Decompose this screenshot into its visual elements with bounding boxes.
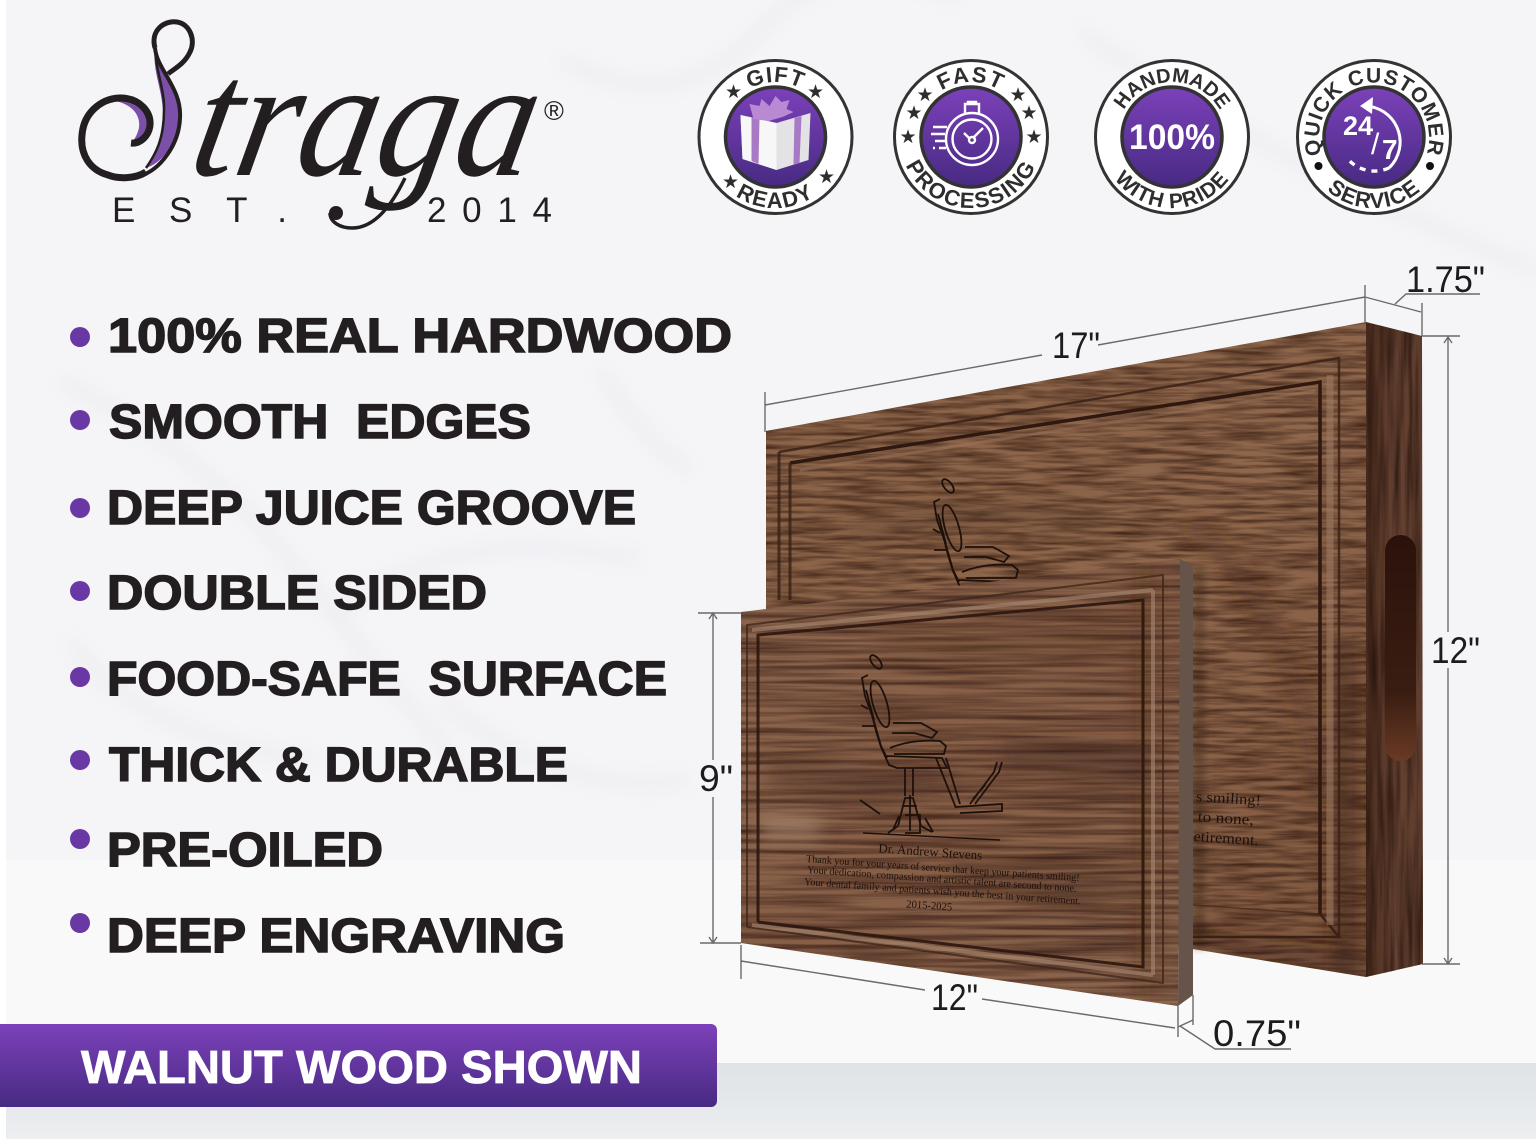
gift box bbox=[740, 96, 810, 170]
icon: 24/7 clock: 7 bbox=[1382, 134, 1398, 165]
feature: pre-oiled: PRE-OILED bbox=[107, 824, 383, 877]
dimension: 0.75 inch thickness: 0.75" bbox=[1213, 1013, 1301, 1054]
registered mark: ® bbox=[544, 96, 564, 126]
feature: double sided: DOUBLE SIDED bbox=[107, 567, 487, 620]
logo: Straga est. 2014 bbox=[82, 22, 564, 230]
badge: fast processing: ★ bbox=[899, 127, 917, 148]
badge: gift ready: ★ bbox=[725, 82, 742, 103]
badge: fast processing: ★ bbox=[905, 103, 923, 124]
badge: fast processing: ★ bbox=[1009, 85, 1027, 106]
engraving: message bbox=[804, 840, 1081, 914]
dimension: 1.75 inch thickness: 1.75" bbox=[1406, 259, 1485, 300]
badge: fast processing: ★ bbox=[1020, 103, 1038, 124]
g descender swash bbox=[329, 178, 405, 228]
dimension: 0.75 inch thickness bbox=[1178, 995, 1301, 1054]
dimension: 1.75 inch thickness bbox=[1365, 259, 1485, 336]
badge: handmade with pride: HANDMADE bbox=[1113, 68, 1231, 110]
engraving: message: Your dedication, compassion and artistic talent are second to none. bbox=[807, 865, 1077, 895]
badge: quick customer service bbox=[1296, 59, 1452, 215]
feature: smooth edges: SMOOTH EDGES bbox=[109, 396, 531, 449]
feature list bbox=[70, 310, 732, 963]
engraving: message: 2015-2025 bbox=[906, 898, 953, 914]
banner: walnut wood shown: WALNUT WOOD SHOWN bbox=[81, 1041, 642, 1093]
feature: thick and durable: THICK & DURABLE bbox=[109, 739, 568, 792]
juice groove bbox=[747, 575, 1163, 983]
logo swash: S flourish bbox=[82, 22, 192, 178]
dimension: 17 inch length: 17" bbox=[1052, 325, 1100, 366]
feature: food-safe surface: FOOD-SAFE SURFACE bbox=[107, 653, 667, 706]
engraving: base line bbox=[863, 833, 1000, 840]
feature: deep juice groove: DEEP JUICE GROOVE bbox=[107, 482, 636, 535]
badge: quick customer service: QUICK CUSTOMER bbox=[1304, 68, 1444, 156]
engraving: message: Thank you for your years of service that keep your patients smiling! bbox=[806, 854, 1080, 884]
badge: gift ready: READY bbox=[736, 184, 809, 208]
badge: handmade with pride: WITH PRIDE bbox=[1116, 169, 1228, 208]
dimension: 12 inch width large bbox=[1422, 336, 1480, 964]
badge: fast processing: FAST bbox=[936, 67, 1006, 90]
icon: 24/7 clock bbox=[1343, 97, 1400, 171]
badge: gift ready: GIFT bbox=[747, 66, 806, 86]
engraving: partial message: s smiling! bbox=[1196, 789, 1261, 809]
engraving: partial message bbox=[1194, 792, 1260, 846]
engraving: partial message: to none, bbox=[1197, 809, 1254, 829]
banner: walnut wood shown bbox=[0, 1024, 717, 1107]
large cutting board bbox=[760, 320, 1424, 980]
badge: gift ready: ★ bbox=[807, 82, 824, 103]
badge: handmade with pride bbox=[1094, 59, 1250, 215]
engraving: partial chair bbox=[932, 478, 1019, 586]
icon: 24/7 clock: / bbox=[1371, 128, 1380, 161]
badge: fast processing: PROCESSING bbox=[906, 159, 1034, 208]
est: EST. bbox=[112, 191, 287, 230]
small cutting board bbox=[735, 555, 1193, 1010]
board face bbox=[735, 555, 1185, 1010]
icon: stopwatch bbox=[931, 102, 998, 165]
engraving: message: Your dental family and patients wish you the best in your retirement. bbox=[804, 877, 1081, 907]
dimension: 12 inch length small: 12" bbox=[931, 977, 978, 1018]
badge: fast processing: ★ bbox=[916, 85, 934, 106]
dimension: 12 inch width large: 12" bbox=[1431, 630, 1480, 671]
feature: 100% real hardwood: 100% REAL HARDWOOD bbox=[108, 310, 732, 363]
dimension: 17 inch length bbox=[765, 285, 1365, 432]
dimension: 9 inch width small bbox=[698, 613, 741, 943]
badge: quick customer service: SERVICE bbox=[1328, 179, 1420, 208]
juice groove bbox=[779, 358, 1339, 937]
badge: gift ready bbox=[698, 59, 854, 215]
board face bbox=[760, 320, 1370, 980]
icon: 24/7 clock: 24 bbox=[1343, 111, 1373, 141]
badge: gift ready: ★ bbox=[818, 167, 835, 188]
badge: gift ready: ★ bbox=[722, 172, 739, 193]
100%: 100% bbox=[1129, 118, 1215, 157]
badge: fast processing bbox=[893, 59, 1049, 215]
board side edge bbox=[1178, 559, 1193, 1006]
engraving: message: Dr. Andrew Stevens bbox=[878, 840, 983, 863]
engraving: dental chair bbox=[860, 653, 1002, 833]
dimension: 9 inch width small: 9" bbox=[699, 758, 733, 799]
feature: deep engraving: DEEP ENGRAVING bbox=[107, 910, 565, 963]
year: 2014 bbox=[427, 191, 552, 230]
shadow cast by small board bbox=[1193, 566, 1205, 950]
badge: fast processing: ★ bbox=[1025, 127, 1043, 148]
engraving: partial message: etirement. bbox=[1193, 829, 1259, 849]
dimension: 12 inch length small bbox=[741, 945, 1178, 1037]
board end with handle bbox=[1366, 322, 1424, 978]
